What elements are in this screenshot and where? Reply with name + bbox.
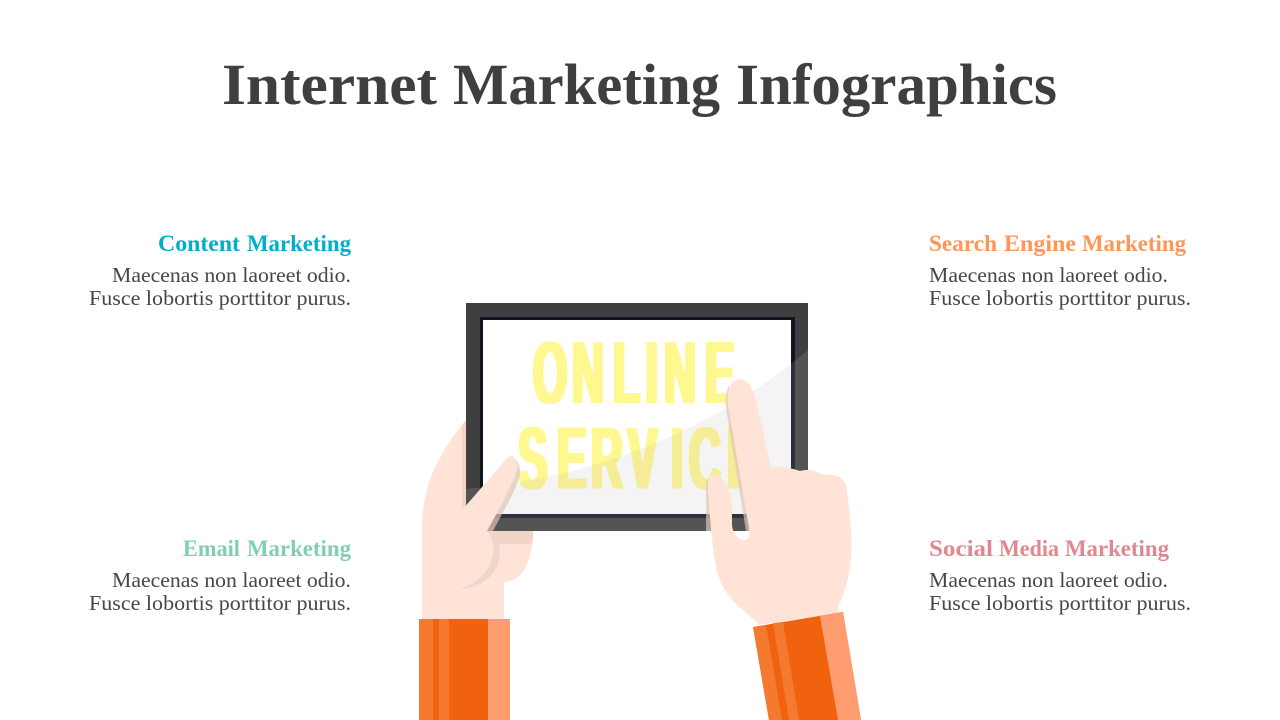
body: search engine marketing: Fusce lobortis porttitor purus. (929, 286, 1191, 310)
heading: content marketing (158, 231, 351, 256)
heading: social media marketing: Social (929, 536, 993, 561)
heading: email marketing: Email (183, 536, 240, 561)
heading: search engine marketing (929, 231, 1186, 256)
body: search engine marketing (929, 263, 1191, 310)
tablet bezel (480, 317, 795, 518)
body: content marketing: Fusce lobortis porttitor purus. (89, 286, 351, 310)
body: content marketing (89, 263, 351, 310)
cuff highlight (488, 619, 510, 720)
text block: social media marketing (929, 536, 1191, 615)
title: Infographics (736, 52, 1057, 117)
heading: content marketing: Content (158, 231, 240, 256)
heading: search engine marketing: Engine (1004, 231, 1076, 256)
cuff base (419, 619, 510, 720)
left thumb (440, 456, 517, 570)
heading: social media marketing: Media (999, 536, 1059, 561)
text block: search engine marketing (929, 231, 1191, 310)
body: social media marketing: Fusce lobortis porttitor purus. (929, 591, 1191, 615)
screen glare (466, 350, 808, 531)
screen line: online: ONLINE (533, 323, 734, 422)
body: email marketing (89, 568, 351, 615)
heading: search engine marketing: Marketing (1082, 231, 1186, 256)
right hand (708, 379, 851, 625)
left hand back (422, 420, 533, 619)
illustration: hands holding tablet (419, 303, 861, 720)
tablet frame (466, 303, 808, 531)
left palm crease (459, 531, 500, 588)
left cuff (419, 619, 510, 720)
heading: social media marketing (929, 536, 1169, 561)
right cuff (753, 612, 861, 720)
cuff highlight (820, 612, 861, 720)
heading: search engine marketing: Search (929, 231, 997, 256)
title: Internet (222, 52, 438, 117)
title (222, 52, 1057, 117)
heading: email marketing (183, 536, 351, 561)
tablet (466, 303, 808, 531)
right thumb and index shadow (706, 385, 750, 531)
body: social media marketing (929, 568, 1191, 615)
text block: content marketing (89, 231, 351, 310)
left hand shadow strip (462, 420, 533, 544)
body: email marketing: Maecenas non laoreet odio. (112, 568, 351, 592)
tablet screen (483, 320, 791, 514)
body: social media marketing: Maecenas non laoreet odio. (929, 568, 1168, 592)
screen text: online service (518, 323, 756, 507)
cuff base (753, 612, 861, 720)
cuff stripes (753, 622, 799, 720)
heading: social media marketing: Marketing (1065, 536, 1169, 561)
text block: email marketing (89, 536, 351, 615)
heading: email marketing: Marketing (247, 536, 351, 561)
heading: content marketing: Marketing (247, 231, 351, 256)
body: content marketing: Maecenas non laoreet odio. (112, 263, 351, 287)
body: email marketing: Fusce lobortis porttitor purus. (89, 591, 351, 615)
screen line: service: SERVICE (518, 409, 756, 507)
cuff stripes (419, 619, 449, 720)
left thumb shadow (486, 456, 520, 531)
body: search engine marketing: Maecenas non laoreet odio. (929, 263, 1168, 287)
title: Marketing (453, 52, 720, 117)
